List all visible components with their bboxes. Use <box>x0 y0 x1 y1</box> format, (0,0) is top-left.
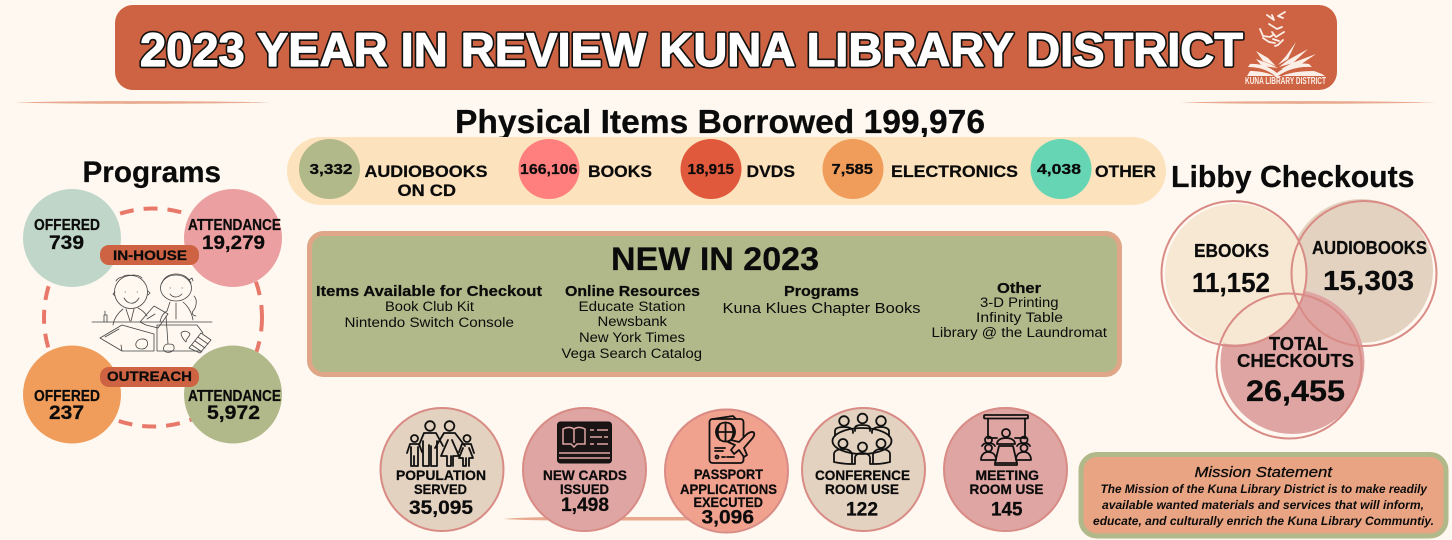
stat text: NEW CARDS <box>543 467 627 483</box>
icon: family <box>407 421 474 466</box>
text: mission body <box>1093 482 1434 528</box>
column: online resources: Vega Search Catalog <box>562 346 702 361</box>
item: electronics <box>822 139 1018 199</box>
stat: conference room use <box>802 407 925 531</box>
icon: passport and plane <box>710 416 754 463</box>
column: other: Library @ the Laundromat <box>932 325 1107 340</box>
stat text: 3,096 <box>702 508 754 528</box>
stat: total checkouts <box>1237 334 1354 408</box>
column: items available for checkout: Items Available for Checkout <box>316 283 542 300</box>
column: online resources <box>562 283 702 361</box>
item: other: 4,038 <box>1037 162 1081 178</box>
text: mission body: available wanted materials and services that will inform, <box>1102 498 1424 512</box>
column: other: Other <box>997 280 1041 297</box>
item: other: OTHER <box>1095 162 1156 181</box>
icon: library card <box>558 422 612 463</box>
item: DVDs: DVDS <box>746 162 795 181</box>
text: mission body: educate, and culturally enrich the Kuna Library Communtiy. <box>1093 514 1434 528</box>
stat text: PASSPORT <box>694 466 763 482</box>
column: online resources: Newsbank <box>598 314 667 329</box>
item: books: BOOKS <box>588 162 652 181</box>
stat: new cards issued <box>523 407 646 531</box>
stat text: 145 <box>991 500 1023 520</box>
heading: physical items borrowed: Physical Items Borrowed 199,976 <box>455 103 985 140</box>
circle: in-house attendance: ATTENDANCE <box>188 217 281 234</box>
stat text: MEETING <box>976 467 1039 483</box>
label: outreach <box>100 367 199 387</box>
stat: population served <box>380 407 504 531</box>
column: other <box>932 280 1107 340</box>
item: DVDs: 18,915 <box>688 162 734 178</box>
title: 2023 YEAR IN REVIEW KUNA LIBRARY DISTRICT <box>140 23 1243 76</box>
stat: audiobooks: 15,303 <box>1323 265 1414 296</box>
stat text: ISSUED <box>560 481 609 497</box>
stat text: APPLICATIONS <box>680 481 777 497</box>
stat text: POPULATION <box>396 467 486 483</box>
column: programs: Kuna Klues Chapter Books <box>722 301 920 317</box>
logo text: KUNA LIBRARY DISTRICT <box>1245 75 1326 87</box>
stat: total checkouts: CHECKOUTS <box>1237 351 1354 371</box>
circle: outreach attendance <box>184 346 282 444</box>
item: audiobooks on CD: AUDIOBOOKS <box>364 162 488 181</box>
stat text: CONFERENCE <box>815 467 910 483</box>
stat text <box>680 466 777 528</box>
item: electronics: ELECTRONICS <box>891 162 1018 181</box>
label: outreach: OUTREACH <box>107 368 192 384</box>
stat text: ROOM USE <box>970 481 1044 497</box>
circle: outreach attendance: ATTENDANCE <box>188 388 281 405</box>
item: DVDs <box>680 139 795 199</box>
item: audiobooks on CD: ON CD <box>398 181 456 200</box>
column: other: Infinity Table <box>976 310 1063 325</box>
column: items available for checkout <box>316 283 542 330</box>
stat text <box>543 467 627 516</box>
stat text: SERVED <box>414 481 467 497</box>
stat text: 122 <box>846 500 878 520</box>
circle: in-house attendance: 19,279 <box>202 233 265 254</box>
circle: outreach attendance: 5,972 <box>207 403 260 424</box>
panel: physical items <box>287 137 1166 205</box>
stat: ebooks <box>1192 241 1270 298</box>
column: online resources: New York Times <box>579 330 685 345</box>
column: online resources: Online Resources <box>565 283 700 300</box>
stat text: ROOM USE <box>825 481 899 497</box>
icon: conference table <box>832 414 892 464</box>
stat text <box>396 467 486 519</box>
column: other: 3-D Printing <box>980 295 1058 310</box>
circle: outreach offered: 237 <box>49 403 84 424</box>
heading: libby checkouts: Libby Checkouts <box>1171 159 1414 194</box>
label: in-house <box>100 245 199 265</box>
stat: total checkouts: TOTAL <box>1269 334 1328 354</box>
stat: passport applications executed <box>665 408 788 532</box>
column: programs <box>722 283 920 317</box>
item: audiobooks on CD <box>299 139 488 200</box>
circle: in-house offered: OFFERED <box>34 217 100 234</box>
circle: in-house attendance <box>184 189 282 287</box>
panel: mission statement <box>1081 454 1446 536</box>
item: books <box>518 139 652 199</box>
item: books: 166,106 <box>520 162 578 178</box>
label: in-house: IN-HOUSE <box>113 247 187 263</box>
stat text <box>970 467 1044 520</box>
text: mission body: The Mission of the Kuna Library District is to make readily <box>1100 482 1428 496</box>
column: items available for checkout: Nintendo Switch Console <box>344 315 514 330</box>
stat: audiobooks: AUDIOBOOKS <box>1312 238 1427 258</box>
heading: programs: Programs <box>82 156 221 189</box>
circle: outreach offered: OFFERED <box>34 388 100 405</box>
icon: library logo with book and birds <box>1245 12 1326 87</box>
stat text: EXECUTED <box>694 494 763 510</box>
stat text: 1,498 <box>561 495 609 516</box>
icon: meeting with presentation screen <box>981 415 1031 465</box>
circle: outreach offered <box>23 346 121 444</box>
column: programs: Programs <box>784 283 859 300</box>
heading: new in 2023: NEW IN 2023 <box>611 241 819 277</box>
item: other <box>1030 139 1156 199</box>
column: items available for checkout: Book Club Kit <box>385 299 474 314</box>
column: online resources: Educate Station <box>578 299 686 314</box>
title: 2023 YEAR IN REVIEW KUNA LIBRARY DISTRICT <box>140 23 1243 76</box>
stat: meeting room use <box>944 407 1067 531</box>
stat text <box>815 467 910 520</box>
stat: total checkouts: 26,455 <box>1246 375 1345 408</box>
title banner <box>115 5 1337 90</box>
illustration: children drawing at a table <box>92 274 212 353</box>
panel: programs <box>23 156 282 444</box>
stat: ebooks: EBOOKS <box>1194 241 1269 261</box>
stat text: 35,095 <box>409 498 473 519</box>
stat: audiobooks <box>1312 238 1427 296</box>
panel: new in 2023 <box>310 234 1120 374</box>
item: audiobooks on CD: 3,332 <box>310 162 352 178</box>
stat: ebooks: 11,152 <box>1192 267 1270 298</box>
item: electronics: 7,585 <box>832 162 873 178</box>
circle: in-house offered: 739 <box>49 233 84 254</box>
panel: libby checkouts <box>1162 159 1436 438</box>
heading: mission statement: Mission Statement <box>1194 464 1333 481</box>
circle: in-house offered <box>23 189 121 287</box>
